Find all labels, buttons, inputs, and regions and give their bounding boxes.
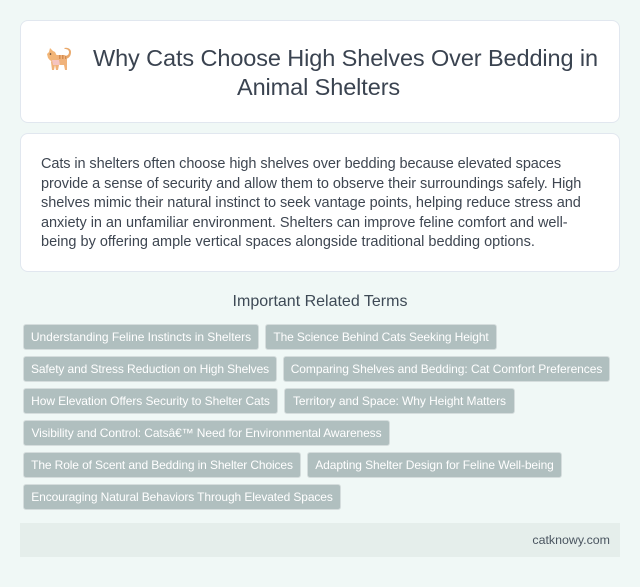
footer site name: catknowy.com (532, 533, 610, 547)
tag: Understanding Feline Instincts in Shelters (31, 330, 251, 344)
icon: orange cat (47, 48, 71, 70)
tag: Comparing Shelves and Bedding: Cat Comfort Preferences (291, 362, 602, 376)
summary paragraph: provide a sense of security and allow them to observe their surroundings safely. High (41, 176, 581, 192)
title (93, 45, 598, 100)
title: Why Cats Choose High Shelves Over Bedding in (93, 45, 598, 71)
tag (23, 324, 259, 350)
tag (23, 452, 301, 478)
heading: related terms: Important Related Terms (233, 293, 407, 310)
tag list (23, 324, 610, 510)
summary paragraph (41, 156, 581, 250)
tag (283, 356, 610, 382)
tag: Encouraging Natural Behaviors Through Elevated Spaces (31, 490, 333, 504)
tag: The Role of Scent and Bedding in Shelter Choices (31, 458, 293, 472)
tag: Territory and Space: Why Height Matters (293, 394, 506, 408)
tag: The Science Behind Cats Seeking Height (273, 330, 489, 344)
tag (23, 356, 277, 382)
tag (284, 388, 515, 414)
tag (23, 484, 341, 510)
summary paragraph: Cats in shelters often choose high shelves over bedding because elevated spaces (41, 156, 561, 172)
footer bar (20, 523, 620, 557)
panel: summary text (20, 133, 620, 272)
summary paragraph: anxiety in an unfamiliar environment. Shelters can improve feline comfort and well- (41, 215, 568, 231)
tag (23, 388, 278, 414)
tag: Adapting Shelter Design for Feline Well-being (315, 458, 554, 472)
title: Animal Shelters (237, 74, 400, 100)
summary paragraph: shelves mimic their natural instinct to seek vantage points, helping reduce stress and (41, 195, 581, 211)
tag (307, 452, 562, 478)
tag: Safety and Stress Reduction on High Shelves (31, 362, 269, 376)
tag (23, 420, 390, 446)
panel: title card (20, 20, 620, 123)
summary paragraph: being by offering ample vertical spaces alongside traditional bedding options. (41, 234, 535, 250)
tag: How Elevation Offers Security to Shelter Cats (31, 394, 270, 408)
tag: Visibility and Control: Catsâ€™ Need for Environmental Awareness (31, 426, 382, 440)
tag (265, 324, 497, 350)
